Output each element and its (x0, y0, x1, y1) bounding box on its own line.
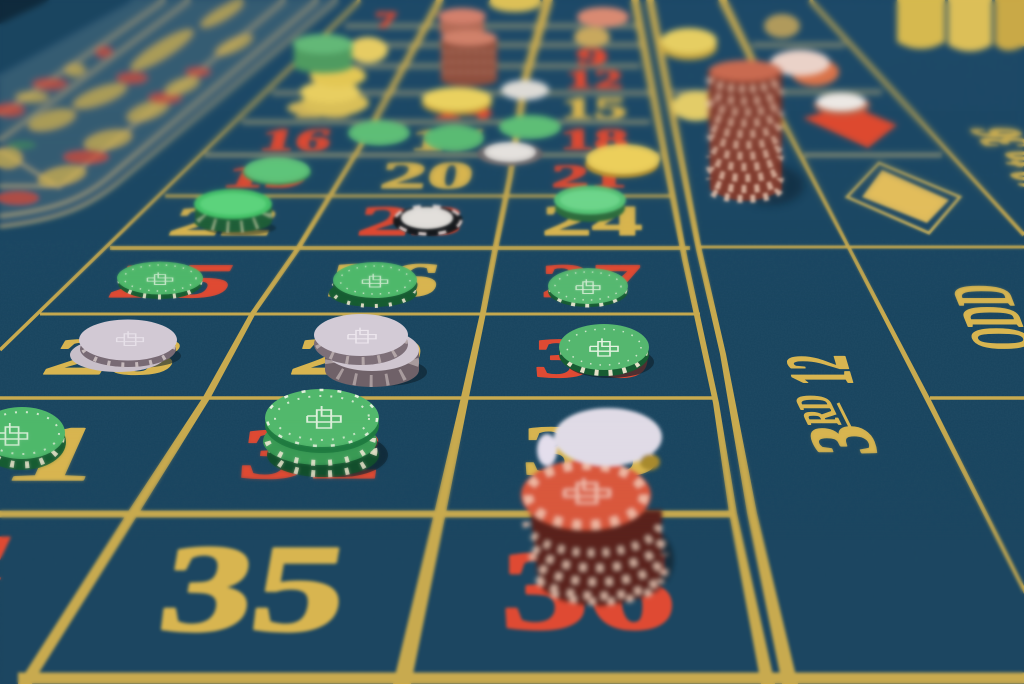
chip: green on 25 (117, 262, 203, 299)
chip: yellow row 14 (422, 87, 492, 115)
chip: green row 19 (243, 158, 311, 185)
chip: yellow beside stack (672, 91, 720, 121)
number 35: 35 (150, 520, 358, 658)
chip stack: green and yellow, far left (287, 34, 388, 117)
number 33: 33 (522, 411, 658, 491)
number 7 far top: 7 (375, 7, 397, 32)
yellow diamond (847, 163, 960, 233)
chips: lavender stack on 29 (314, 314, 427, 387)
chip: peach far (577, 7, 629, 27)
number 18: 18 (560, 122, 628, 156)
number 29: 29 (283, 328, 432, 385)
number 12: 12 (565, 65, 623, 94)
number 14: 14 (432, 95, 492, 124)
number 28: 28 (32, 328, 196, 385)
number 36: 36 (501, 528, 675, 653)
number 30: 30 (533, 327, 651, 389)
chip: white on red diamond (814, 93, 870, 115)
chip: yellow top edge (489, 0, 541, 12)
chip: green on 30 (559, 324, 654, 378)
chips: lavender pair on 28 (70, 320, 181, 372)
tall red chip stack (708, 60, 804, 205)
number 20: 20 (377, 154, 477, 197)
chip: green row 24 (554, 186, 626, 222)
number 25: 25 (99, 255, 247, 308)
chip: green stack row 22 (194, 189, 276, 235)
number 17: 17 (408, 122, 485, 157)
chip: white row 23 (393, 206, 463, 236)
big chip stack on 33 and 36 (521, 408, 674, 606)
depth of field blur: mid table (0, 0, 1024, 340)
label: 3rd 12: 3 (786, 425, 898, 455)
chip: tan far (574, 27, 610, 47)
label: 3rd 12: 12 (767, 355, 873, 385)
chip: tan blob right (764, 14, 800, 38)
chip: white row 14 (501, 80, 549, 100)
chip: green row 16 (348, 120, 410, 146)
chip: green row 17 (424, 125, 484, 151)
label: 3rd 12 (767, 355, 898, 455)
number 22: 22 (162, 200, 286, 244)
depth of field blur: near table (0, 420, 1024, 684)
number 27: 27 (541, 255, 641, 308)
chips: green stack on 32 (263, 389, 388, 477)
number 13: 13 (290, 95, 358, 123)
number 23: 23 (354, 198, 468, 244)
chip: peach stack right (770, 50, 839, 86)
number 16: 16 (256, 123, 336, 157)
chip: white row 17 (477, 142, 543, 166)
number 19: 19 (217, 158, 317, 194)
label: 3rd 12: RD (784, 395, 853, 425)
number 9: 9 (576, 44, 608, 71)
chip: green row 17 right (499, 115, 561, 139)
number 21: 21 (551, 158, 627, 194)
racetrack betting area, top left (0, 0, 338, 227)
chips: far top yellow stacks (897, 0, 1024, 52)
number 26: 26 (322, 253, 447, 307)
chip: yellow right of line (661, 28, 717, 60)
number 15: 15 (561, 92, 627, 125)
chip: green on 31 (0, 407, 66, 470)
chip: green on 27 (548, 268, 628, 307)
number 32: 32 (234, 414, 389, 494)
chip stack: red far left-center (438, 8, 497, 86)
number 24: 24 (542, 197, 642, 244)
chips: green pair on 26 (329, 262, 417, 307)
chip: yellow row 18 (585, 144, 660, 178)
depth of field blur: far table (0, 0, 1024, 228)
red diamond (803, 105, 897, 148)
